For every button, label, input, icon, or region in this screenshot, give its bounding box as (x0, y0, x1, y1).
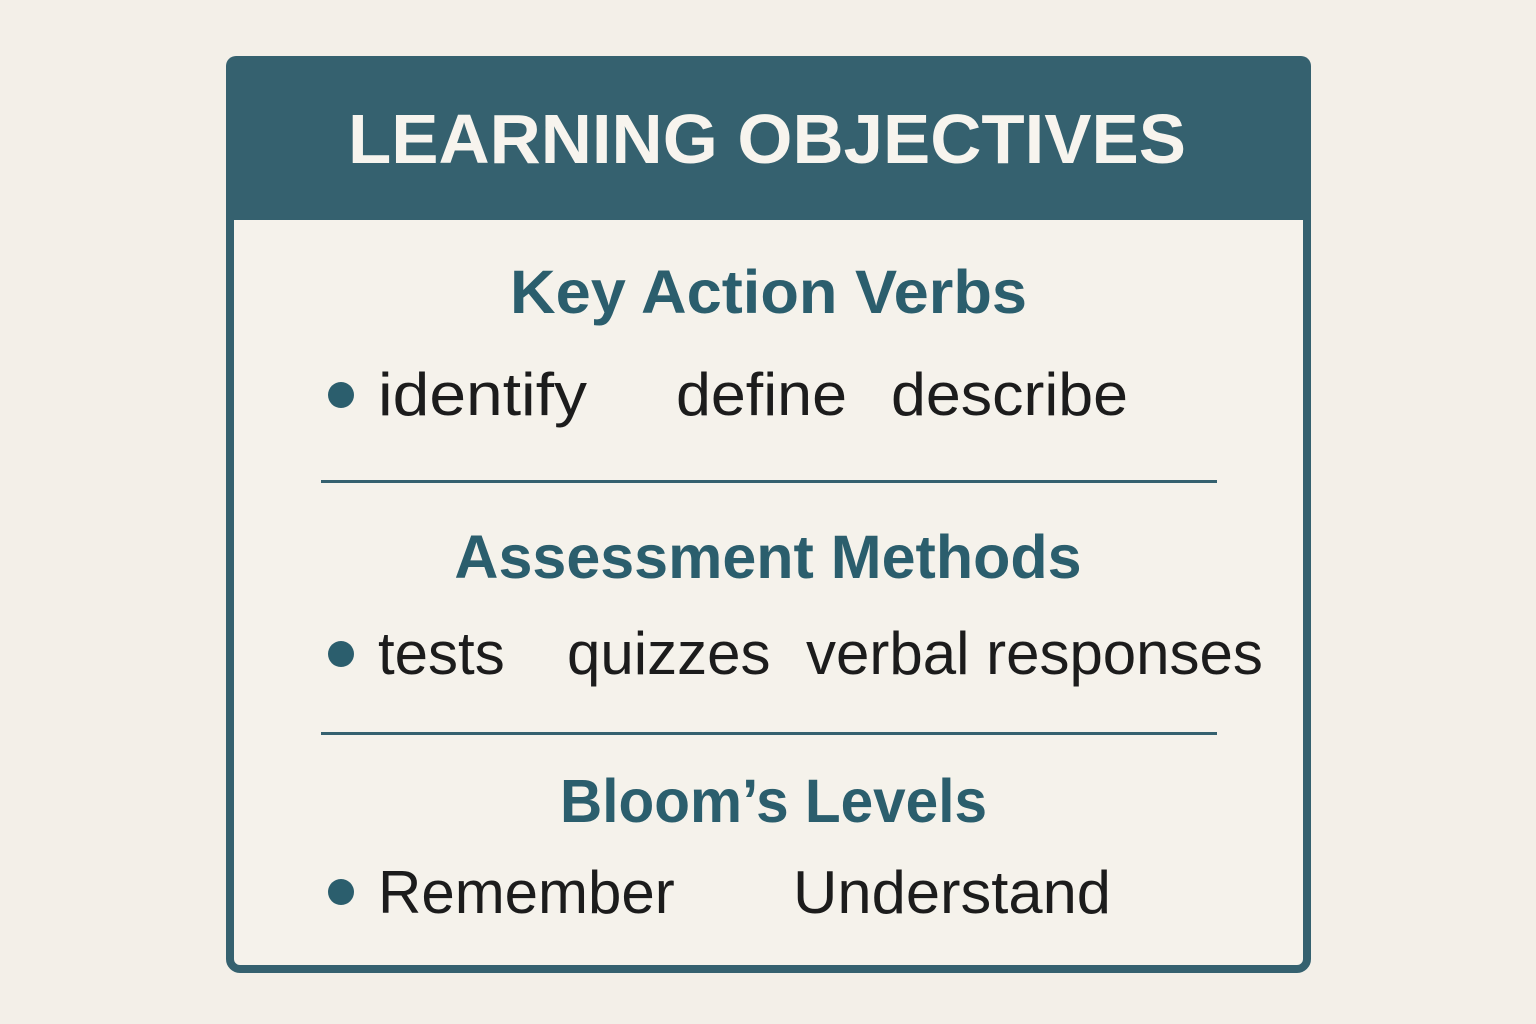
header band (226, 56, 1311, 220)
heading: bloom's levels: Bloom’s Levels (560, 767, 987, 835)
section: key action verbs (328, 258, 1128, 428)
section: bloom's levels (328, 767, 1111, 926)
bullet list: methods (328, 620, 1263, 687)
bullet list: verbs: describe (891, 361, 1128, 428)
bullet list: methods: verbal responses (806, 620, 1263, 687)
bullet list: verbs (328, 361, 1128, 428)
bullet list: methods: tests (378, 620, 505, 687)
bullet list: verbs: define (676, 361, 847, 428)
panel: learning objectives card (226, 56, 1311, 969)
heading: key action verbs: Key Action Verbs (510, 258, 1027, 326)
bullet list: levels: Understand (793, 859, 1111, 926)
title: LEARNING OBJECTIVES (348, 100, 1186, 178)
section: assessment methods (328, 523, 1263, 687)
heading: assessment methods: Assessment Methods (454, 523, 1082, 591)
bullet list: methods: quizzes (567, 620, 770, 687)
bullet list: levels: Remember (378, 859, 675, 926)
bullet list: verbs: identify (378, 361, 587, 428)
bullet list: levels (328, 859, 1111, 926)
